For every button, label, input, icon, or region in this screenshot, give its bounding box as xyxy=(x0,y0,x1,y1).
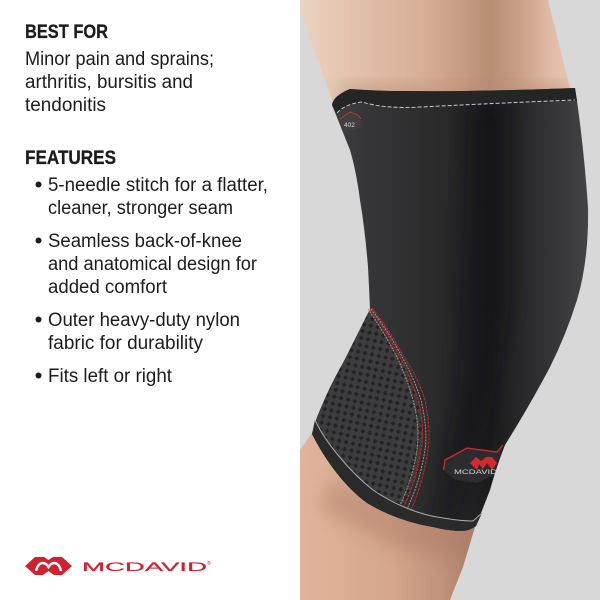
logo mark xyxy=(25,557,72,575)
best for body text xyxy=(25,49,214,116)
red and grey side seam xyxy=(368,308,429,510)
logo wordmark: MCDAVID xyxy=(82,562,207,574)
McDavid logo xyxy=(25,557,211,575)
knee sleeve xyxy=(312,88,588,531)
photo background panel xyxy=(300,0,600,600)
heading: best for: BEST FOR xyxy=(25,21,108,43)
heading: features: FEATURES xyxy=(25,147,116,169)
text block: features xyxy=(25,147,268,387)
feature: outer nylon fabric xyxy=(36,310,240,354)
sleeve shading xyxy=(432,117,497,518)
size badge: 402: 402 xyxy=(344,122,355,129)
feature: outer nylon fabric: fabric for durability xyxy=(48,333,203,354)
top cuff band xyxy=(332,88,577,114)
sleeve body xyxy=(312,88,588,531)
size badge: 402 xyxy=(340,112,361,131)
feature: 5-needle stitch: 5-needle stitch for a flatter, xyxy=(48,175,268,196)
feature: 5-needle stitch: cleaner, stronger seam xyxy=(48,198,233,219)
best for body text: arthritis, bursitis and xyxy=(25,72,193,93)
text block: best for xyxy=(25,21,214,116)
feature: seamless back-of-knee: added comfort xyxy=(48,277,168,298)
sleeve logo badge: MCDAVID xyxy=(454,470,498,476)
bottom hem stitching xyxy=(315,420,482,521)
registered mark: ® xyxy=(207,560,211,567)
mesh panel xyxy=(316,311,422,508)
top cuff stitching xyxy=(337,100,575,113)
best for body text: tendonitis xyxy=(25,95,106,116)
feature: outer nylon fabric: Outer heavy-duty nylon xyxy=(48,310,240,331)
feature: seamless back-of-knee xyxy=(36,231,258,298)
upper thigh skin xyxy=(300,0,570,100)
best for body text: Minor pain and sprains; xyxy=(25,49,214,70)
feature: fits left or right: Fits left or right xyxy=(48,366,173,387)
lower calf skin xyxy=(300,430,480,600)
sleeve logo badge xyxy=(443,445,503,483)
feature: seamless back-of-knee: Seamless back-of-knee xyxy=(48,231,242,252)
feature: seamless back-of-knee: and anatomical design for xyxy=(48,254,258,275)
feature: 5-needle stitch xyxy=(36,175,268,219)
bottom hem band xyxy=(312,420,482,531)
